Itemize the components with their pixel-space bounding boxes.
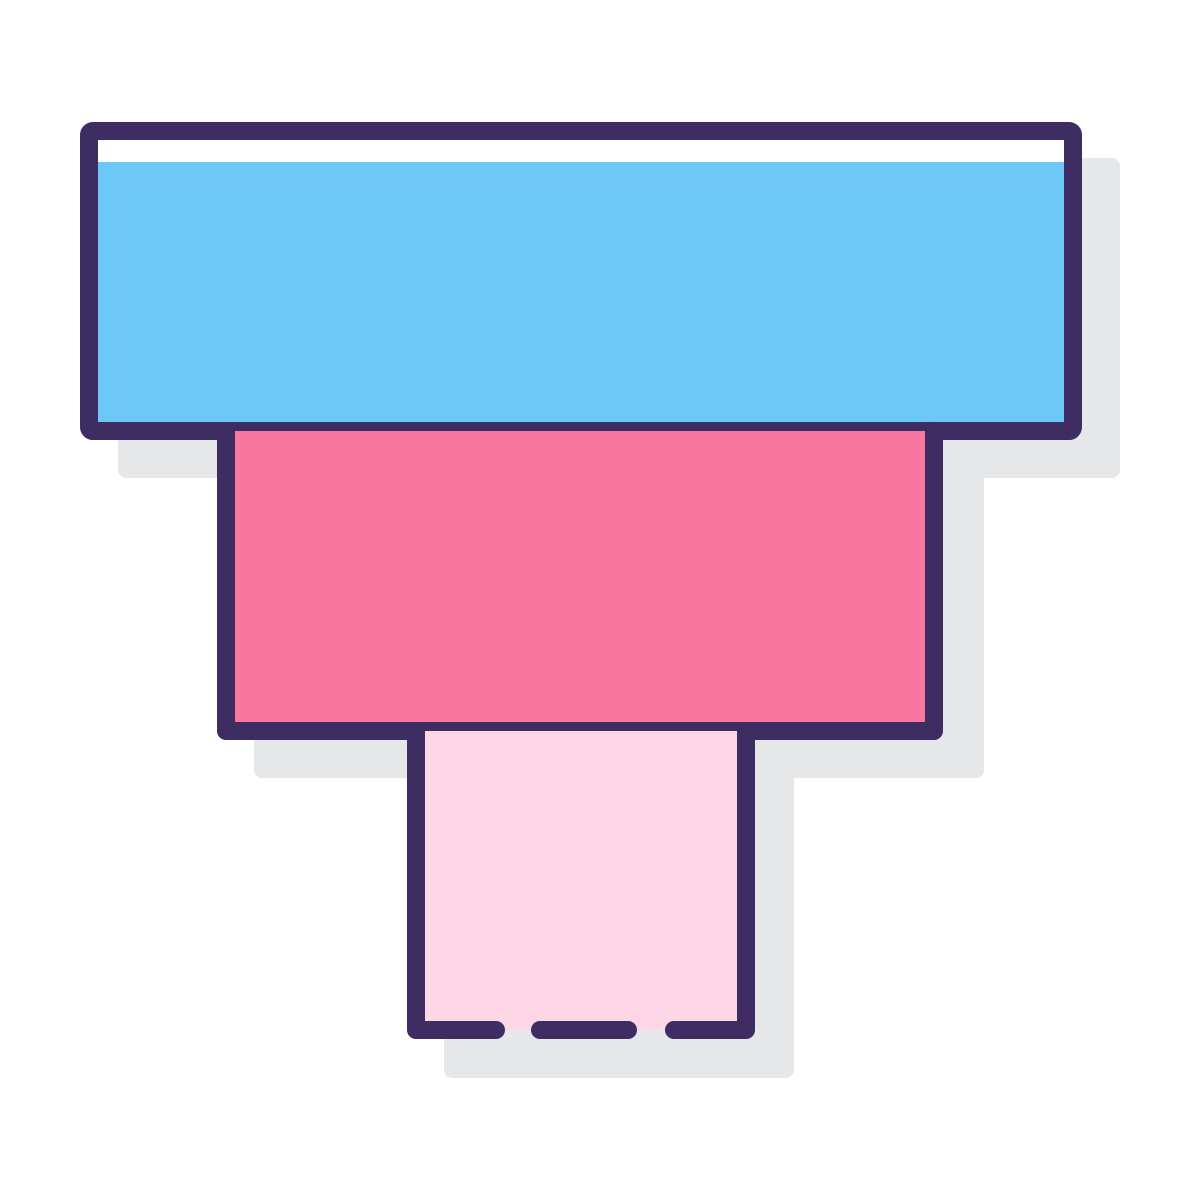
tier: bottom light pink bbox=[416, 731, 746, 1030]
shadows bbox=[118, 158, 1120, 1078]
tier: top blue bbox=[89, 131, 1073, 431]
tier: middle pink bbox=[226, 431, 934, 731]
